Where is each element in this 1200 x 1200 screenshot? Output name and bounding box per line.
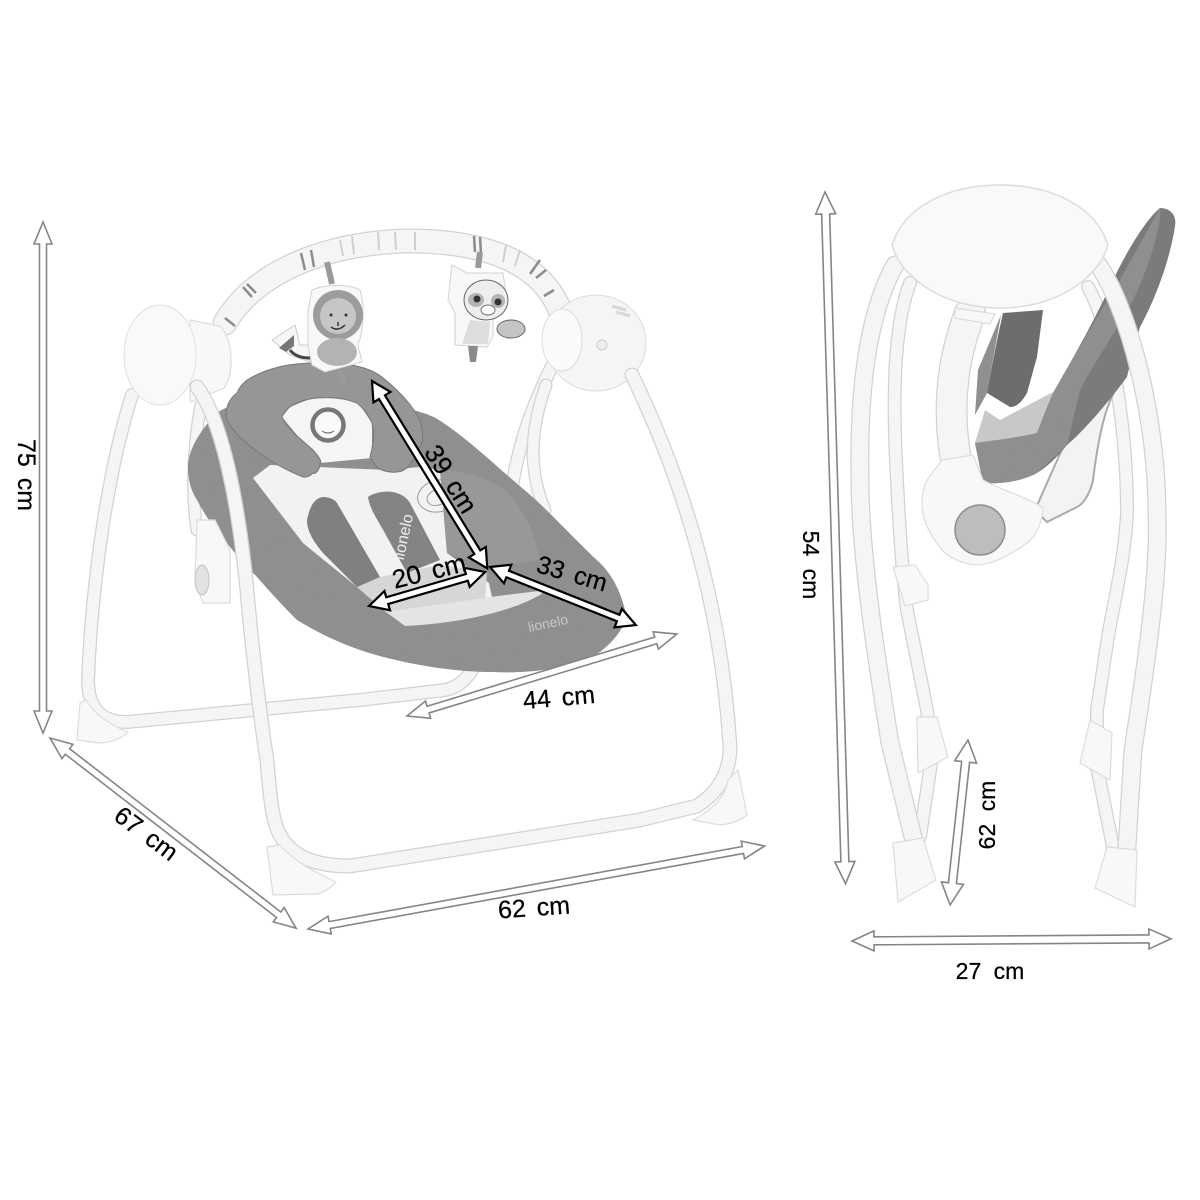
dimension labels — [12, 439, 1024, 984]
headrest — [226, 363, 423, 477]
label: 39 cm: 39 cm — [418, 439, 484, 519]
side padding — [440, 470, 540, 568]
label: 67 cm: 67 cm — [109, 801, 183, 867]
label: 44 cm: 44 cm — [522, 681, 596, 715]
toy: lion — [272, 286, 363, 372]
label: 62 cm: 62 cm — [497, 892, 571, 924]
harness straps — [307, 492, 440, 587]
seat heather band — [975, 208, 1160, 483]
label: 54 cm: 54 cm — [798, 531, 824, 599]
pivot hub — [195, 520, 230, 603]
rear frame — [88, 358, 556, 722]
seat shell — [188, 397, 625, 672]
dimension arrows: seat — [363, 376, 640, 634]
arrow: 27 cm folded width — [852, 929, 1171, 951]
label: 27 cm: 27 cm — [956, 958, 1024, 984]
toy hanger straps — [327, 252, 480, 384]
top pod — [892, 185, 1108, 308]
arrow: 33 cm seat depth — [486, 558, 640, 634]
side foot caps — [893, 717, 1137, 907]
arch toy bar — [225, 232, 561, 326]
buckle strip — [357, 565, 487, 612]
toy: raccoon — [448, 265, 525, 362]
label: 75 cm: 75 cm — [12, 439, 40, 511]
arrow: 20 cm seat width — [366, 562, 488, 616]
fold clip — [893, 565, 928, 606]
arrow: 54 cm folded height — [815, 192, 856, 884]
brand on seat: lionelo — [527, 611, 570, 635]
right motor pod — [542, 295, 646, 391]
hub with dial — [922, 455, 1043, 565]
circle motif — [418, 480, 444, 512]
arrow: 62 cm width — [306, 837, 766, 938]
cushion heather — [975, 315, 1001, 415]
dimension arrows: grey — [34, 192, 1171, 951]
arrow: 75 cm height — [34, 222, 52, 733]
arrow: 39 cm seat length — [363, 376, 496, 574]
arrow: 62 cm folded depth — [939, 739, 979, 906]
swing: folded side view — [860, 185, 1175, 907]
lower seat band — [386, 590, 547, 626]
front tubes — [860, 263, 1157, 847]
seat sliver — [975, 208, 1175, 483]
seat insert — [253, 465, 492, 612]
head pad with lion badge — [282, 396, 372, 463]
label: 20 cm: 20 cm — [389, 547, 469, 595]
back cushion — [987, 310, 1043, 407]
fabric bag — [1035, 378, 1123, 522]
label: 33 cm: 33 cm — [533, 551, 611, 597]
label: 62 cm folded: 62 cm — [974, 781, 1000, 849]
swing: three-quarter view — [77, 232, 747, 895]
arrow: 44 cm inner width — [404, 625, 679, 725]
front frame — [197, 375, 730, 866]
arrow: 67 cm depth — [44, 731, 302, 935]
inner seat — [975, 392, 1053, 443]
foot caps — [77, 700, 747, 895]
rear tubes — [895, 283, 1127, 847]
brand on strap: lionelo — [391, 513, 417, 561]
left motor pod — [124, 305, 231, 405]
centre arm — [951, 308, 995, 465]
